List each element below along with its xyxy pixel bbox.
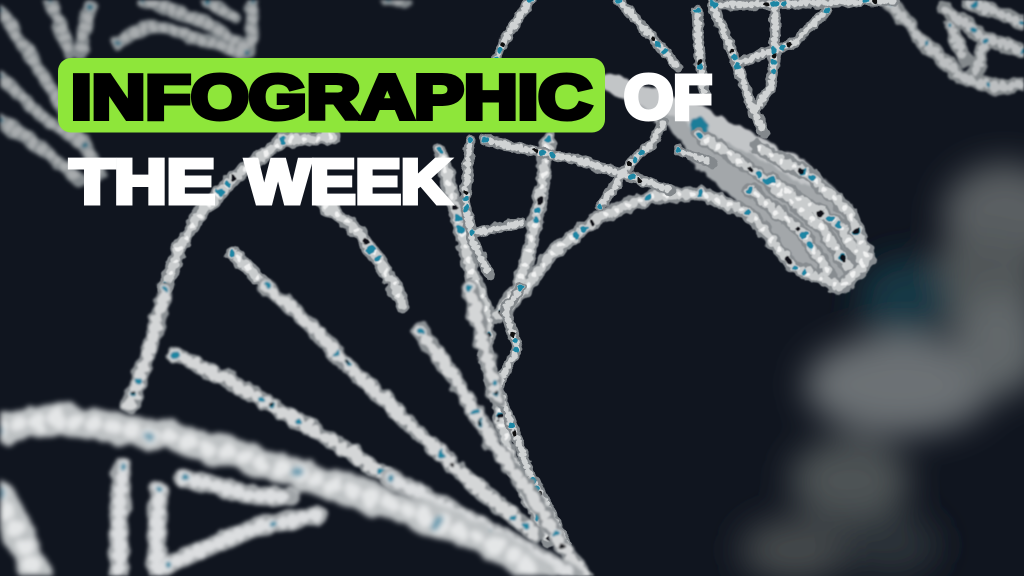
DNA head: dense end of the central helix [604,76,870,290]
heading line: THE WEEK [70,148,450,217]
heading line: THE WEEK: WEEK [246,148,450,217]
top-left blurred DNA strand [0,0,405,180]
heading word: OF: OF [624,64,712,132]
smoke: blurred foreground DNA at lower right [740,163,1024,576]
left and lower helix: soft beaded strands [130,287,588,576]
heading word: INFOGRAPHIC: INFOGRAPHIC [71,64,592,132]
title [58,58,712,217]
central helix: beaded mid strands [165,135,868,540]
heading line: THE WEEK: THE [70,148,215,217]
foreground thick blurred strand [0,418,540,576]
green highlight box [58,58,605,132]
lower helix: thick soft strands [119,468,574,576]
top-right DNA strand [891,3,1024,88]
central helix: thin beaded strands and rungs [465,0,894,545]
